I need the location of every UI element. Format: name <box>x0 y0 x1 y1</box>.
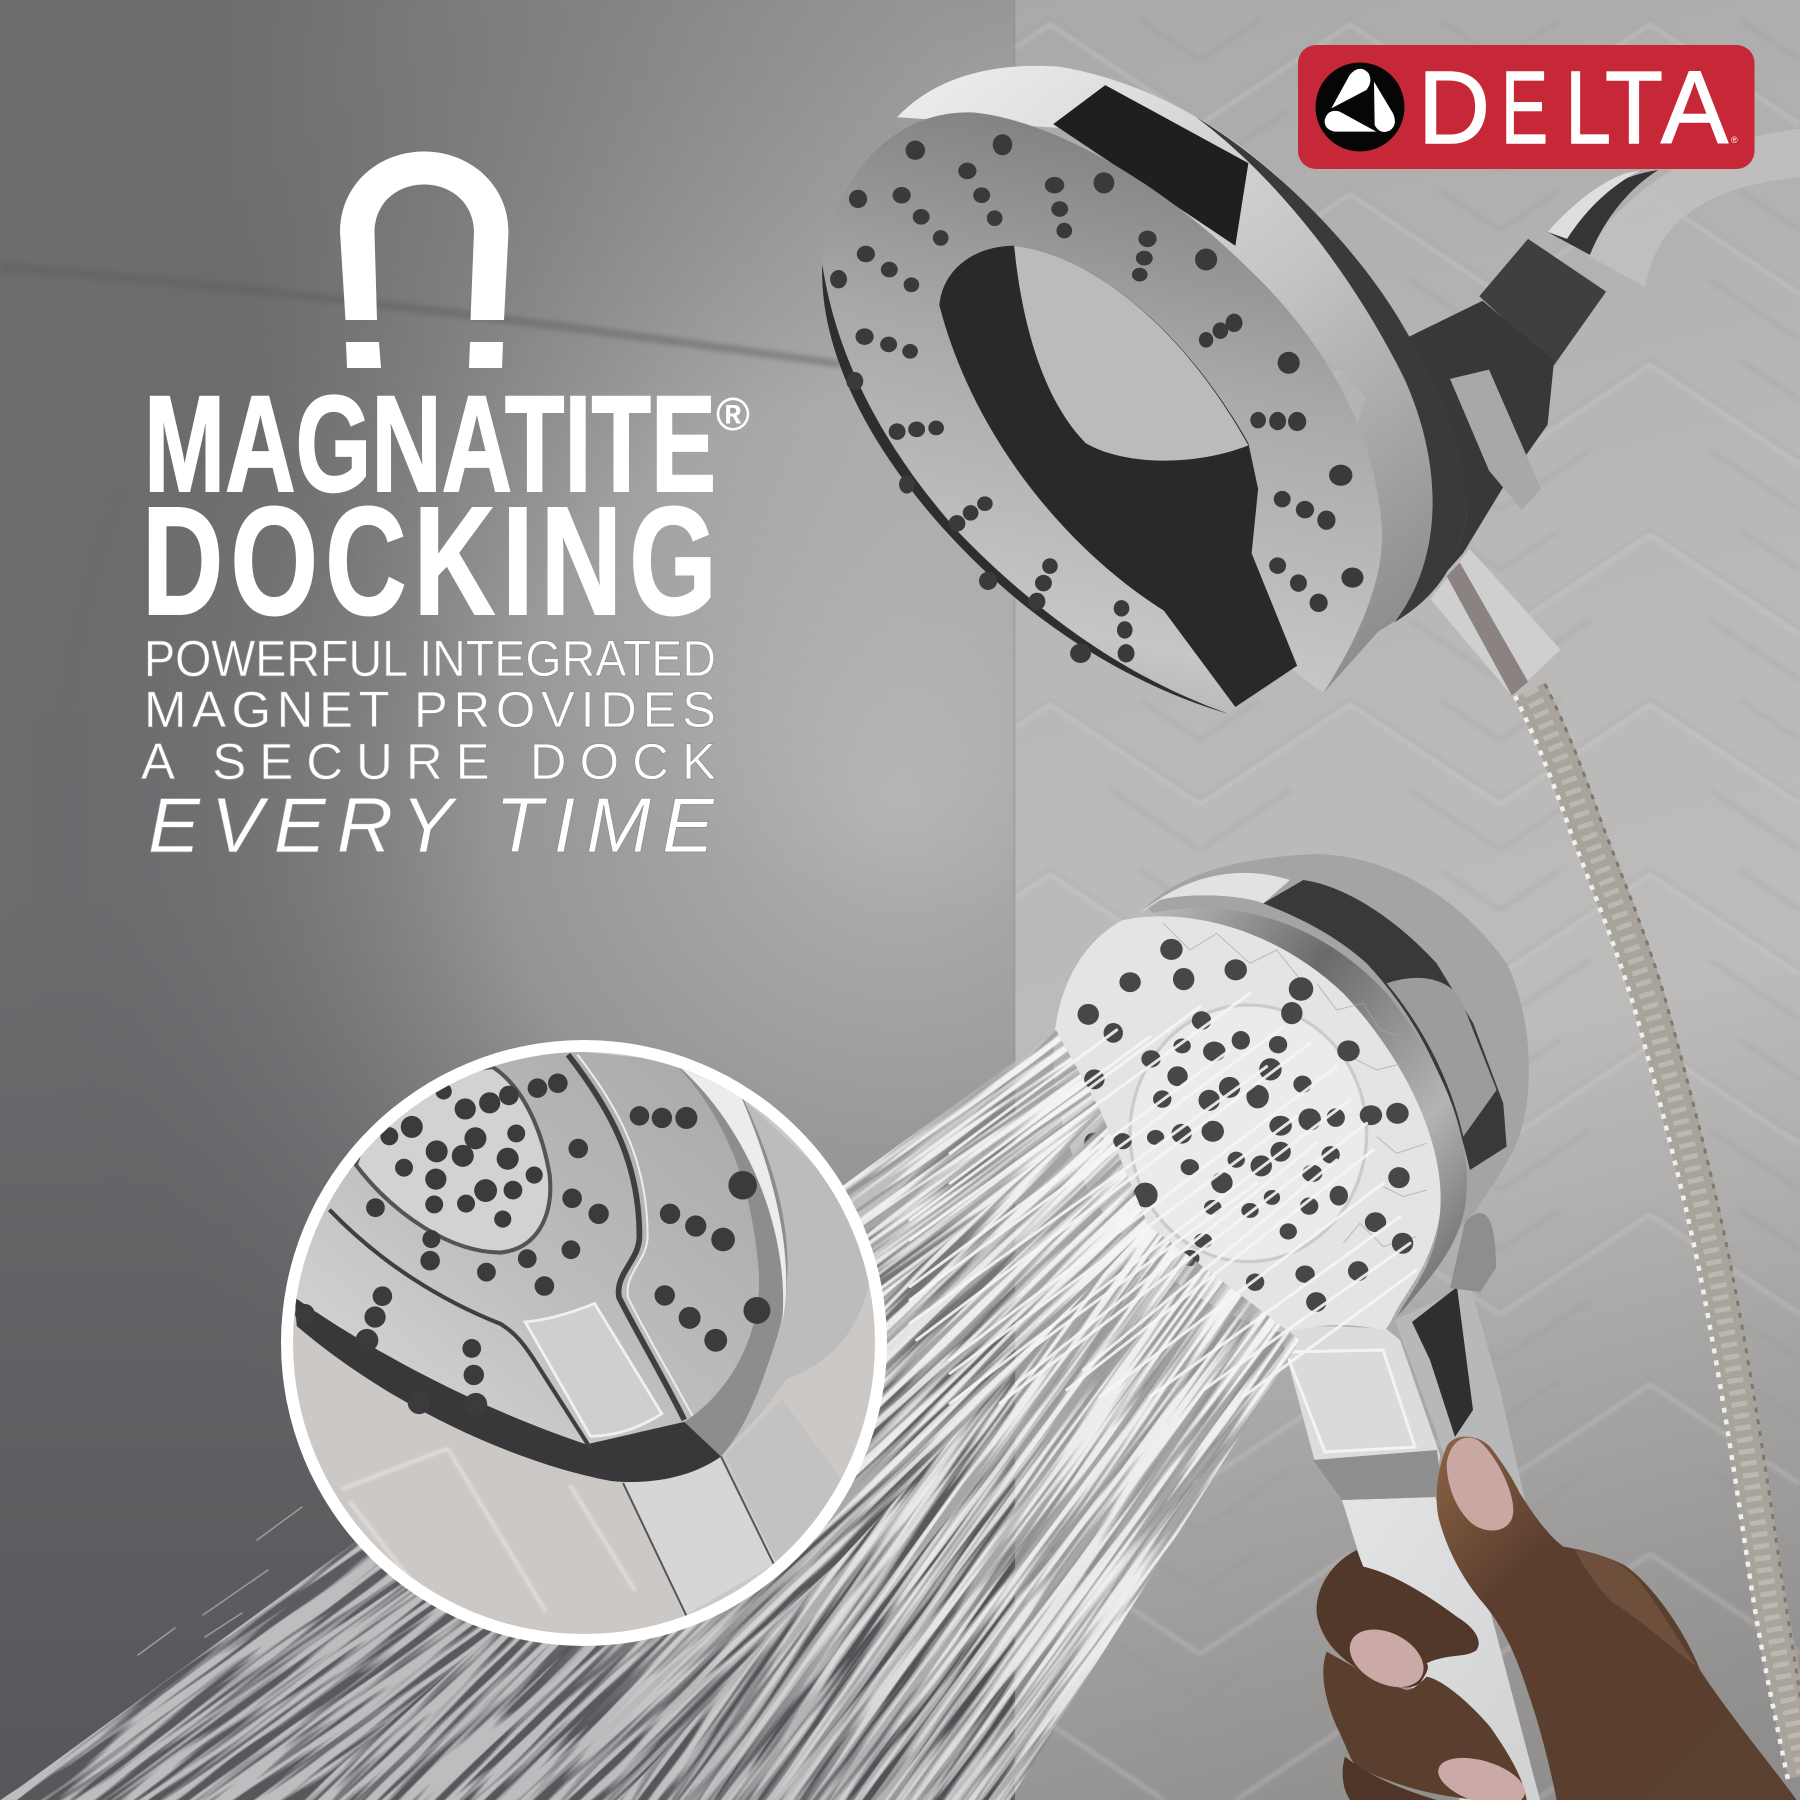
tile lines in inset <box>342 1448 635 1628</box>
body side <box>721 1098 872 1457</box>
face ripple lines <box>1163 923 1427 1247</box>
handheld shower: nozzles <box>1078 939 1413 1312</box>
stem stripes <box>1447 562 1528 696</box>
side knob <box>1450 1213 1496 1292</box>
arm pipe <box>1587 129 1800 287</box>
water jets over the head <box>910 993 1417 1403</box>
first nail <box>1340 1618 1433 1699</box>
button <box>525 1304 662 1436</box>
back of hand highlight <box>1575 1550 1697 1667</box>
handheld shower: head <box>1053 854 1529 1333</box>
tiled wall <box>1013 0 1800 1800</box>
white ring <box>281 1040 887 1646</box>
second nail <box>1433 1749 1531 1800</box>
groove highlight <box>577 1055 692 1416</box>
handheld shower: handle <box>1280 1213 1540 1800</box>
heading: Docking: DOCKING <box>142 475 724 647</box>
text block: description <box>141 630 716 869</box>
text block: description: EVERY TIME <box>148 781 715 869</box>
inset circle: nozzle close-up <box>260 1020 890 1650</box>
button housing <box>1280 1326 1440 1475</box>
hand holding the shower <box>1317 1437 1797 1800</box>
face outer rim <box>672 1061 788 1457</box>
registered: ® <box>1731 135 1738 145</box>
logo emblem <box>1316 62 1404 152</box>
central disk <box>1130 1005 1367 1262</box>
third finger <box>1343 1757 1437 1800</box>
face dark outer edge <box>822 264 1229 714</box>
chrome trim <box>1127 908 1467 1317</box>
text block: description: MAGNET PROVIDES <box>144 681 716 738</box>
hose <box>1515 684 1800 1780</box>
dark collar reflection <box>1263 880 1507 1170</box>
chrome side of handle <box>1395 1285 1525 1500</box>
heading: Magnatite: MAGNATITE <box>144 368 716 521</box>
stray droplets <box>138 1507 302 1655</box>
first finger <box>1317 1550 1479 1687</box>
wordmark: D <box>1418 50 1490 165</box>
button <box>1286 1350 1415 1452</box>
mount <box>1398 301 1554 590</box>
handle side <box>726 1400 841 1562</box>
Delta logo badge <box>1298 45 1754 169</box>
outer rim <box>897 66 1466 693</box>
ring opening <box>939 246 1297 707</box>
nozzles <box>295 1073 770 1416</box>
groove left <box>329 1210 590 1448</box>
swivel connector <box>1479 239 1606 365</box>
collar <box>1313 1450 1440 1500</box>
spray nozzles <box>830 134 1363 663</box>
wordmark: A <box>1661 50 1728 165</box>
text block: description: A SECURE DOCK <box>141 733 716 790</box>
thumb nail <box>1447 1437 1513 1531</box>
icon: horseshoe magnet <box>340 152 508 368</box>
lever <box>1450 370 1541 510</box>
registered mark: ® <box>716 388 750 440</box>
handle edge <box>623 1457 774 1616</box>
body back <box>1147 854 1529 1283</box>
face ring <box>822 112 1382 714</box>
rim black reflection <box>1053 85 1248 246</box>
hand palm and thumb <box>1437 1437 1797 1800</box>
handle <box>623 1457 776 1616</box>
bright crescent <box>681 1068 786 1321</box>
grip <box>1342 1497 1540 1800</box>
pipe highlight <box>1548 170 1640 239</box>
collar highlight <box>1387 978 1497 1137</box>
overhead shower head <box>822 66 1800 714</box>
pipe elbow <box>1548 170 1658 255</box>
groove right <box>568 1055 684 1420</box>
face <box>296 1052 759 1457</box>
dark rim band <box>295 1297 721 1482</box>
docking stem <box>1430 549 1561 696</box>
rim back edge <box>1196 117 1467 622</box>
second finger <box>1323 1652 1527 1800</box>
dark side reflection <box>1412 1287 1473 1437</box>
bright streaks near the head <box>552 1030 1300 1800</box>
water stream <box>0 993 1417 1800</box>
wordmark: T <box>1605 50 1663 165</box>
wordmark: E <box>1501 50 1548 165</box>
wall seen through ring <box>1014 246 1248 461</box>
wordmark: L <box>1565 50 1611 165</box>
text block: description: POWERFUL INTEGRATED <box>144 630 716 687</box>
head face <box>1053 916 1441 1333</box>
top highlight <box>1140 873 1290 913</box>
central disc <box>356 1067 550 1253</box>
